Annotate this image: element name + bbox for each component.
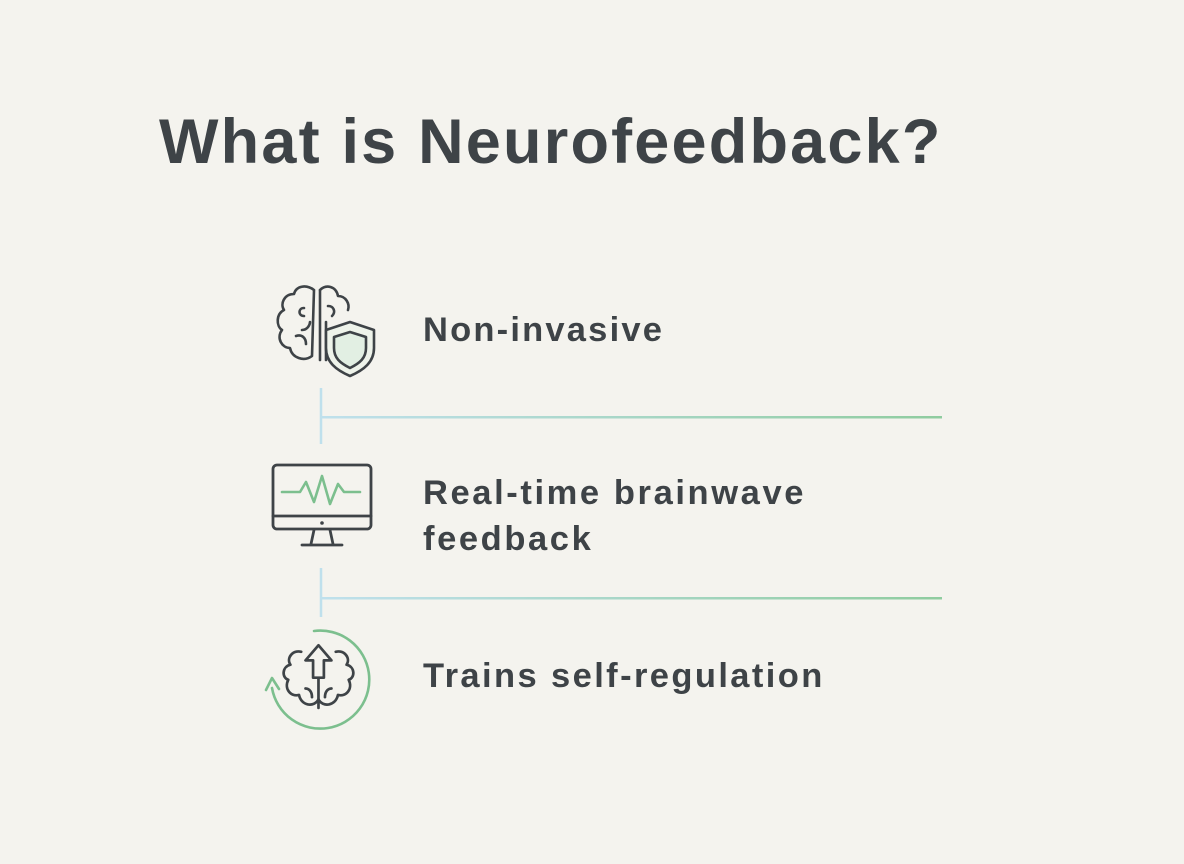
label: non-invasive: Non-invasive	[423, 311, 664, 349]
label: real-time: feedback	[423, 520, 593, 558]
title: What is Neurofeedback?	[159, 107, 943, 177]
icon: brain with shield	[276, 285, 376, 378]
icon: brain with arrow and cycle	[264, 629, 371, 730]
label: trains self-regulation: Trains self-regulation	[423, 657, 825, 695]
label: real-time	[423, 474, 806, 558]
icon: monitor with wave	[272, 464, 372, 546]
label: real-time: Real-time brainwave	[423, 474, 806, 512]
